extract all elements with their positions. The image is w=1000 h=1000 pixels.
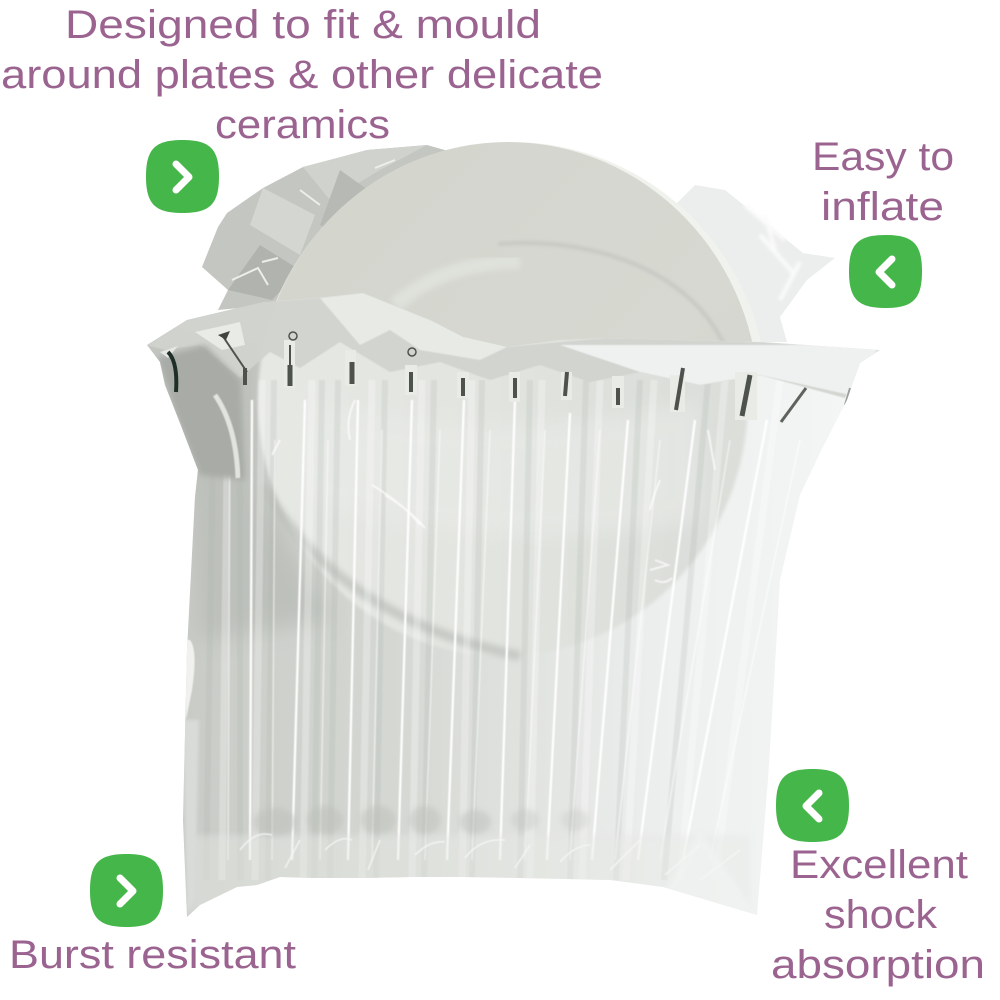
label: designed to fit: ceramics	[215, 103, 390, 147]
label: designed to fit: Designed to fit & mould	[65, 3, 541, 47]
bag: rear wrap behind plate	[202, 145, 835, 342]
plastic wrinkles	[222, 400, 715, 582]
left dark fold	[158, 345, 245, 480]
icon: arrow right, bottom left	[90, 854, 163, 927]
bag: inflated front sleeve	[147, 293, 880, 917]
label: excellent shock absorption: shock	[824, 893, 938, 937]
icon: arrow left, bottom right	[776, 769, 849, 842]
label: easy to inflate	[812, 135, 954, 229]
plate inner ring	[498, 243, 724, 345]
valve tabs	[195, 322, 757, 420]
label: excellent shock absorption: absorption	[771, 943, 985, 987]
label: burst resistant: Burst resistant	[9, 933, 296, 977]
icon: arrow right, top left	[146, 140, 219, 213]
label: easy to inflate: Easy to	[812, 135, 954, 179]
label: excellent shock absorption: Excellent	[790, 843, 968, 887]
dark left side shading	[155, 356, 324, 634]
label: easy to inflate: inflate	[821, 185, 944, 229]
label: designed to fit: around plates & other delicate	[1, 53, 603, 97]
air valves	[168, 331, 850, 422]
plate	[256, 142, 768, 662]
icon: arrow left, top right	[849, 235, 922, 308]
plate seen through bag	[257, 298, 748, 662]
label: excellent shock absorption	[771, 843, 985, 987]
bag bottom folds	[183, 640, 757, 920]
tube stripes	[206, 380, 800, 880]
label: designed to fit	[1, 3, 603, 147]
top cuff	[147, 293, 880, 480]
